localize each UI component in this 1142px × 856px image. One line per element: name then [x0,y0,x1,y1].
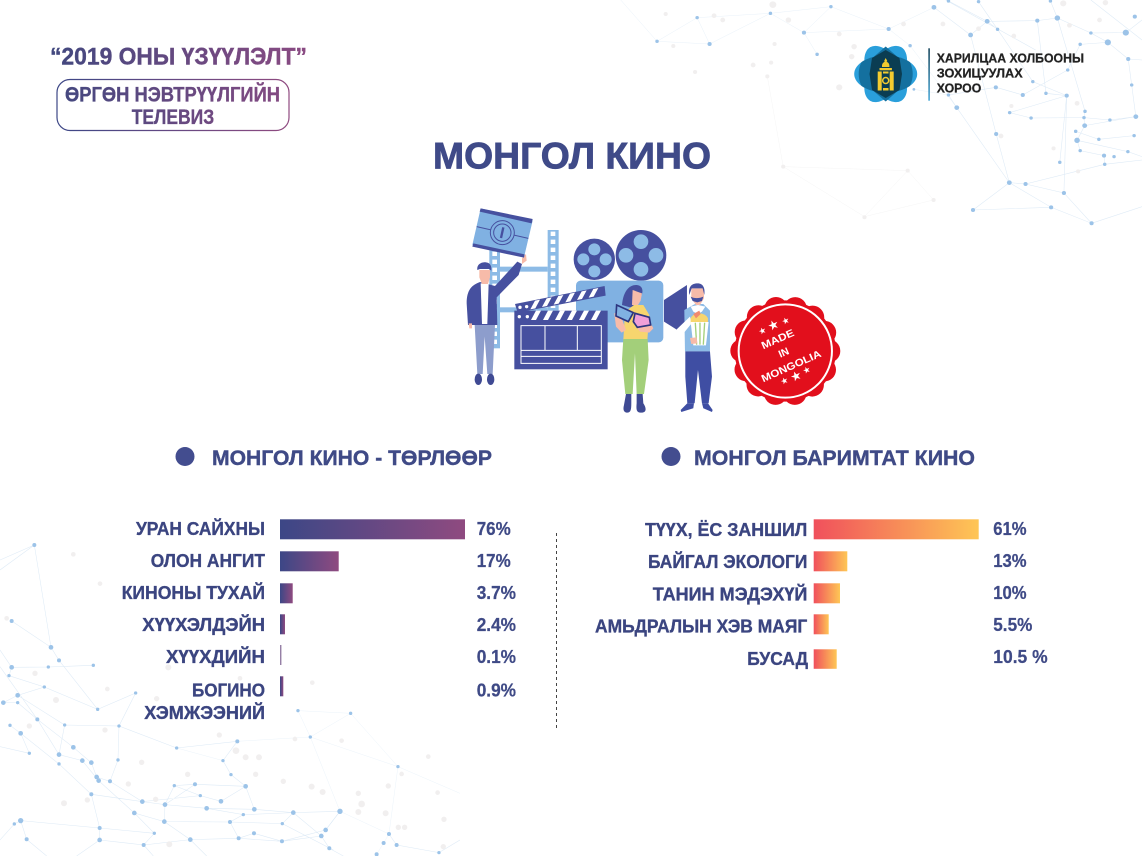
bar chart: film by genre: 76% [477,518,511,539]
category box [57,80,289,130]
stamp: made in Mongolia: ★ [780,314,791,327]
title: МОНГОЛ КИНО [433,134,711,176]
bar chart: film by genre: ХҮҮХДИЙН [166,646,265,667]
bar chart: film by genre: ОЛОН АНГИТ [151,550,266,571]
icon: clapperboard [514,286,608,369]
bar chart: documentary film: 13% [993,550,1027,571]
bar chart: documentary film: БУСАД [747,648,808,669]
stamp: made in Mongolia: MADE [760,328,796,352]
bar chart: film by genre: 3.7% [477,582,516,603]
icon: man holding sign [467,254,527,385]
stamp: made in Mongolia [735,300,836,402]
category box: ТЕЛЕВИЗ [132,106,214,129]
organisation name [937,51,1084,96]
organisation name: ЗОХИЦУУЛАХ [937,66,1023,81]
background network: top right [621,0,1142,225]
background network: bottom left [0,543,460,856]
bar chart: film by genre: 17% [477,550,511,571]
bar chart: film by genre: 0.9% [477,680,516,700]
bar chart: documentary film: ТАНИН МЭДЭХҮЙ [653,584,807,604]
icon: regulator emblem [854,46,918,102]
section heading: film by genre: МОНГОЛ КИНО - ТӨРЛӨӨР [212,446,492,470]
stamp: made in Mongolia: ★ [779,374,790,387]
bar chart: film by genre: КИНОНЫ ТУХАЙ [122,582,265,603]
stamp: made in Mongolia: ★ [788,368,804,385]
bar chart: film by genre [122,518,516,723]
icon: film strip [489,230,559,348]
icon: film reels and camera [574,230,687,342]
bar chart: documentary film: БАЙГАЛ ЭКОЛОГИ [648,551,807,572]
bar chart: film by genre: 2.4% [477,614,516,635]
icon: man with popcorn [677,283,713,412]
illustration: film crew [467,208,836,413]
stamp: made in Mongolia: ★ [801,364,812,376]
organisation name: ХОРОО [937,81,981,96]
stamp: made in Mongolia: ★ [757,324,768,337]
icon: sign board [472,208,533,258]
bar chart: documentary film: ТҮҮХ, ЁС ЗАНШИЛ [645,519,807,540]
stamp: made in Mongolia: IN [777,346,791,361]
bar chart: documentary film: АМЬДРАЛЫН ХЭВ МАЯГ [595,616,808,636]
stamp: made in Mongolia: ★ [765,317,781,334]
organisation name: ХАРИЛЦАА ХОЛБООНЫ [937,51,1084,66]
bar chart: documentary film: 61% [993,518,1027,539]
section heading: documentary film: МОНГОЛ БАРИМТАТ КИНО [694,446,975,470]
bar chart: documentary film [595,518,1048,669]
logo [854,46,1084,102]
bar chart: film by genre: УРАН САЙХНЫ [136,518,265,539]
category box: ӨРГӨН НЭВТРҮҮЛГИЙН [65,82,280,106]
bar chart: film by genre: 0.1% [477,646,516,667]
bar chart: film by genre: ХЭМЖЭЭНИЙ [144,702,265,723]
bar chart: film by genre: ХҮҮХЭЛДЭЙН [142,614,265,635]
stamp: made in Mongolia: MONGOLIA [760,349,824,385]
report heading: “2019 ОНЫ ҮЗҮҮЛЭЛТ” [50,44,307,70]
bar chart: documentary film: 10% [993,582,1027,603]
bar chart: film by genre: БОГИНО [192,680,265,700]
bar chart: documentary film: 5.5% [993,614,1032,635]
icon: woman with 3D glasses [614,285,653,413]
bar chart: documentary film: 10.5 % [993,646,1048,667]
